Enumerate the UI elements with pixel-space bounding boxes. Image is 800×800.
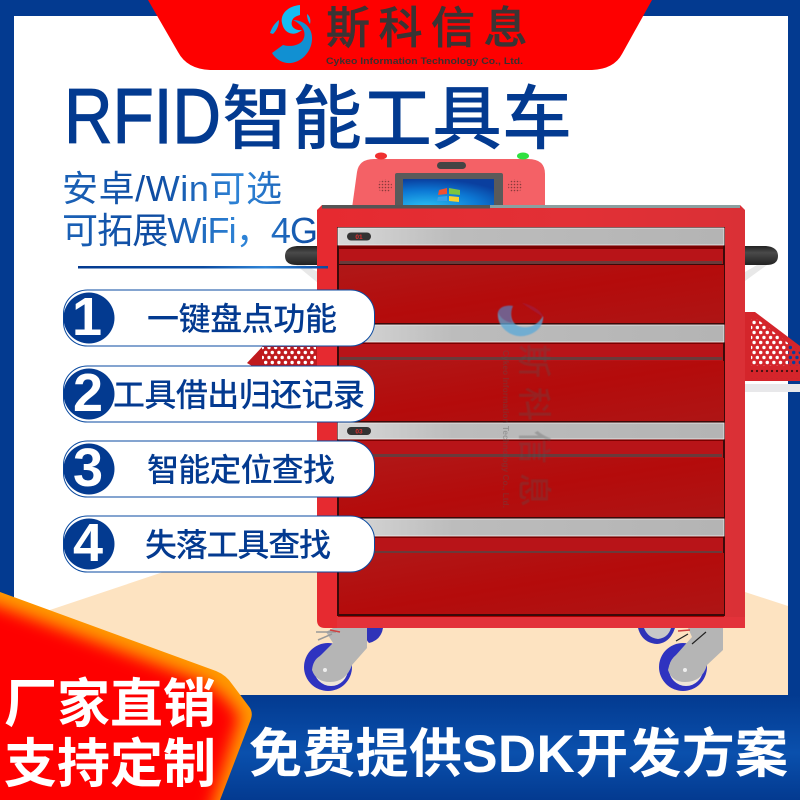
speaker right [508, 179, 522, 193]
subtitle line 1: 安卓/Win可选 [62, 168, 282, 209]
side handle right [745, 246, 778, 281]
subtitle text [62, 168, 318, 251]
icon: window logo on screen [437, 188, 460, 202]
header red banner with logo [148, 0, 652, 70]
watermark English name: Cykeo Information Technology Co., Ltd. [501, 350, 510, 508]
subtitle line 2: 可拓展WiFi，4G [62, 210, 318, 251]
side tray left [247, 342, 318, 372]
logo English name: Cykeo Information Technology Co., Ltd. [326, 56, 523, 67]
drawer 3: 03 [355, 428, 363, 436]
drawer 2 [338, 325, 724, 421]
card reader slot [437, 162, 466, 169]
indicator light red [375, 152, 387, 160]
number badge 1 [64, 292, 114, 344]
front right caster [659, 628, 723, 691]
badge line 2: 支持定制 [4, 735, 216, 794]
icon: company logo swirl [270, 5, 312, 63]
indicator light green [517, 152, 529, 160]
feature 3 pill [64, 438, 374, 498]
feature 4 pill [64, 513, 374, 573]
title Chinese part: 智能工具车 [222, 80, 572, 158]
speaker left [378, 179, 392, 193]
tablet screen bezel [395, 173, 503, 209]
number badge 3 [64, 444, 114, 494]
feature 1 pill: 1 [72, 287, 102, 347]
cart inner cavity [337, 227, 725, 616]
watermark company name: 斯科信息 [514, 344, 552, 516]
feature 1 pill [64, 287, 374, 347]
tool cart body [317, 205, 745, 628]
drawer 4 [338, 519, 724, 614]
side tray right [745, 312, 800, 392]
front left caster [304, 628, 367, 691]
badge line 1: 厂家直销 [4, 675, 216, 734]
number badge 4 [64, 518, 114, 570]
corner red badge [0, 580, 260, 800]
title Latin part: RFID [64, 72, 221, 160]
feature 3 pill: 3 [73, 438, 103, 498]
divider rule [78, 266, 328, 268]
feature 2 pill: 2 [73, 363, 103, 423]
bottom blue band [0, 695, 800, 800]
tablet head unit [352, 152, 545, 209]
back casters [366, 628, 675, 644]
feature 3 label: 智能定位查找 [147, 452, 335, 488]
feature 2 label: 工具借出归还记录 [113, 377, 365, 413]
feature 4 pill: 4 [73, 513, 103, 573]
feature 2 pill [64, 363, 374, 423]
main title [64, 72, 572, 160]
feature 1 label: 一键盘点功能 [147, 301, 337, 337]
logo wordmark: 斯科信息 [326, 4, 536, 53]
watermark logo [498, 303, 544, 336]
bottom band slogan: 免费提供SDK开发方案 [249, 725, 788, 784]
number badge 2 [64, 368, 114, 420]
cart frame [317, 205, 745, 628]
side handle left [285, 246, 318, 283]
beige floor shape [14, 486, 788, 695]
drawer 1: 01 [355, 234, 363, 241]
tablet screen [403, 179, 494, 208]
drawer 3 [338, 423, 724, 517]
drawer 1 [338, 228, 724, 323]
feature 4 label: 失落工具查找 [145, 527, 331, 563]
